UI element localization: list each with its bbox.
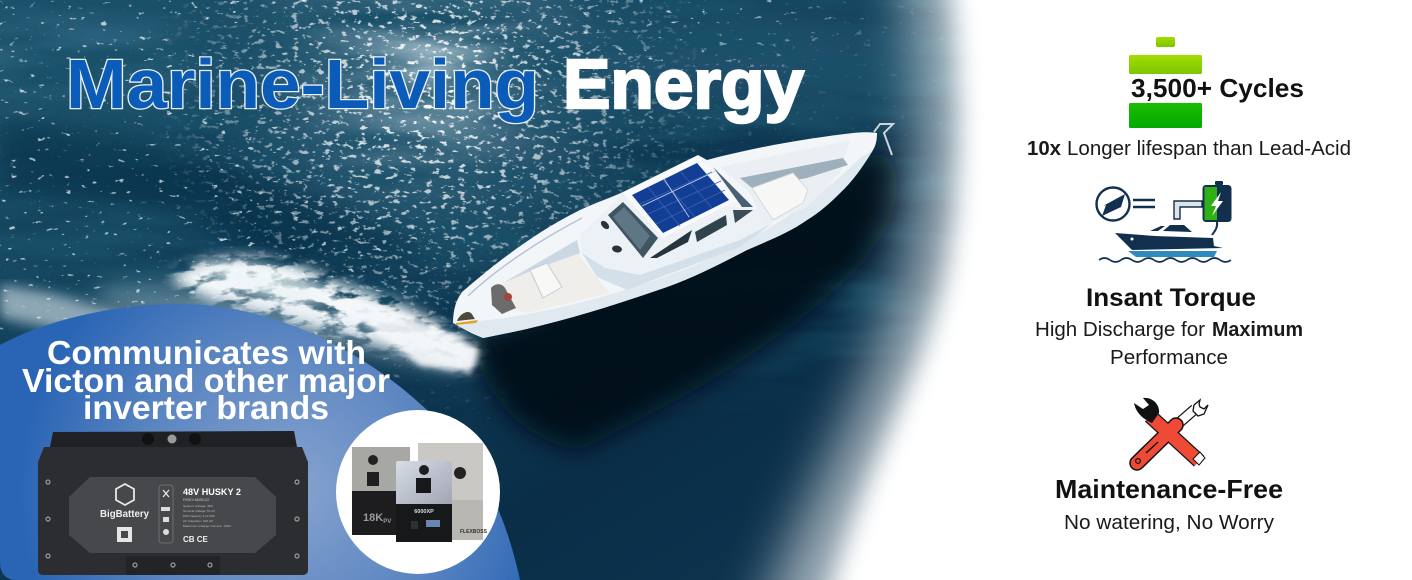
boat — [453, 124, 893, 338]
inverter: front 6000XP: 6000XP — [414, 509, 434, 515]
title — [66, 45, 804, 123]
inverter: rear right: FLEXBOSS — [460, 529, 488, 535]
forward deck — [720, 140, 850, 225]
title: Marine-Living: Marine-Living — [66, 45, 539, 123]
windshield — [608, 202, 658, 258]
description: discharge — [1035, 319, 1303, 369]
description: no watering: No watering, No Worry — [1064, 512, 1274, 534]
boat shadow on water — [470, 150, 897, 450]
product: 48V Husky 2 battery: Maximum Charge Current: 100A — [183, 524, 231, 528]
bow fitting — [874, 124, 893, 155]
title: Energy: Energy — [563, 45, 804, 123]
icon: crossed wrenches — [1134, 398, 1208, 465]
panel heading — [22, 334, 390, 426]
product: 48V Husky 2 battery: 48V HUSKY 2 — [183, 487, 241, 497]
aft deck — [503, 240, 610, 313]
heading: Maintenance-Free: Maintenance-Free — [1055, 474, 1283, 504]
heading: 3,500+ Cycles: 3,500+ Cycles — [1131, 73, 1304, 103]
product: 48V Husky 2 battery: System Voltage: 48V — [183, 504, 213, 508]
icon: battery — [1129, 37, 1202, 128]
white fade at photo edge — [736, 0, 1020, 580]
feature: instant torque — [1035, 181, 1303, 369]
description: discharge: Performance — [1110, 347, 1228, 369]
product: 48V Husky 2 battery — [38, 431, 308, 575]
description: discharge: High Discharge for — [1035, 319, 1205, 341]
photo: ocean background — [0, 0, 1020, 580]
product: 48V Husky 2 battery: BigBattery — [100, 508, 149, 520]
description: lifespan: 10x — [1027, 138, 1061, 160]
engine gear — [491, 284, 516, 314]
description: discharge: Maximum — [1212, 319, 1303, 341]
inverter: rear right — [418, 443, 488, 540]
boat hull — [453, 132, 877, 338]
hardtop roof — [623, 156, 737, 238]
icon: boat charging — [1096, 181, 1232, 262]
panel: inverter compatibility — [0, 304, 520, 580]
inverter: front 6000XP — [396, 461, 452, 542]
product: 48V Husky 2 battery: Ah Capacity: 100 Ah — [183, 519, 213, 523]
panel heading: Victon and other major — [22, 362, 390, 399]
panel heading: inverter brands — [83, 389, 329, 426]
inverter: rear left — [352, 447, 410, 535]
cabin windows — [650, 230, 692, 258]
solar panel — [632, 163, 729, 233]
product: 48V Husky 2 battery: Nominal Voltage: 51.2V — [183, 509, 215, 513]
feature: maintenance-free — [1055, 398, 1283, 534]
cabin — [580, 193, 773, 290]
heading: Insant Torque: Insant Torque — [1086, 284, 1256, 312]
product: 48V Husky 2 battery: FHSKY-48050-G2 — [183, 497, 210, 502]
boat wake foam — [0, 258, 478, 372]
product: 48V Husky 2 battery: CB CE — [183, 535, 209, 544]
inverter: rear left: 18K — [363, 512, 383, 524]
inverter circle — [336, 410, 500, 574]
feature: 3,500+ cycles — [1027, 37, 1351, 160]
inverter: rear left: PV — [383, 519, 391, 525]
panel heading: Communicates with — [47, 334, 366, 371]
description: lifespan: Longer lifespan than Lead-Acid — [1067, 138, 1351, 160]
product: 48V Husky 2 battery: kWh Capacity: 5.12 kWh — [183, 514, 215, 518]
panel background — [0, 304, 520, 580]
